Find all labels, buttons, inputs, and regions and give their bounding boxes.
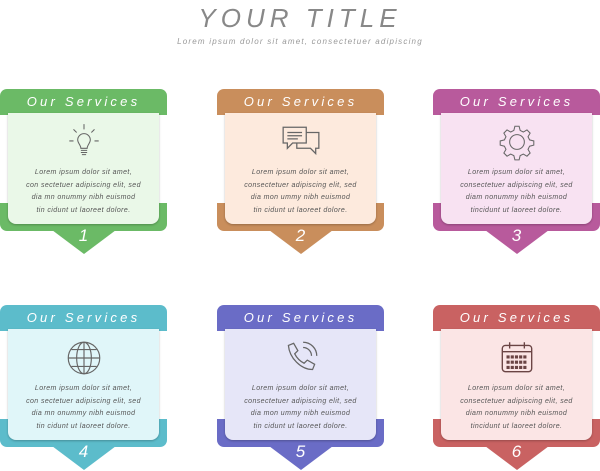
panel: service 1 <box>0 89 167 254</box>
header 2 <box>217 89 384 115</box>
text 2: Lorem ipsum dolor sit amet, <box>252 169 349 176</box>
text 5: consectetuer adipiscing elit, sed <box>244 398 357 404</box>
number 4: 4 <box>79 442 88 461</box>
text 1: Lorem ipsum dolor sit amet, <box>35 169 132 176</box>
subtitle: Lorem ipsum dolor sit amet, consectetuer adipiscing <box>177 37 423 46</box>
text 3: Lorem ipsum dolor sit amet, <box>468 169 565 176</box>
number 1: 1 <box>79 226 88 245</box>
text 6 <box>460 384 573 430</box>
icon: phone <box>288 342 318 370</box>
text 4: tin cidunt ut laoreet dolore. <box>36 422 131 430</box>
header 1 <box>0 89 167 115</box>
icon: gear <box>500 126 534 160</box>
text 4: dia mn onummy nibh euismod <box>32 410 135 417</box>
text 5: Lorem ipsum dolor sit amet, <box>252 385 349 392</box>
header 3 <box>433 89 600 115</box>
text 5: dia mon ummy nibh euismod <box>251 410 350 417</box>
text 3 <box>460 168 573 214</box>
text 1: dia mn onummy nibh euismod <box>32 194 135 201</box>
text 1 <box>26 168 141 214</box>
text 5 <box>244 384 357 430</box>
header 1: Our Services <box>27 94 140 109</box>
text 6: tincidunt ut laoreet dolore. <box>471 422 562 430</box>
icon: lightbulb <box>69 124 99 156</box>
text 5: tin cidunt ut laoreet dolore. <box>253 422 348 430</box>
text 6: diam nonummy nibh euismod <box>466 410 567 417</box>
text 1: tin cidunt ut laoreet dolore. <box>36 206 131 214</box>
panel: service 4 <box>0 305 167 470</box>
panel: service 2 <box>217 89 384 254</box>
text 2: consectetuer adipiscing elit, sed <box>244 182 357 188</box>
header 4: Our Services <box>27 310 140 325</box>
icon: globe <box>68 342 100 374</box>
header 3: Our Services <box>460 94 573 109</box>
text 2 <box>244 168 357 214</box>
header 5 <box>217 305 384 331</box>
text 6: consectetuer adipiscing elit, sed <box>460 398 573 404</box>
text 4: con sectetuer adipiscing elit, sed <box>26 398 141 404</box>
number 3: 3 <box>512 226 521 245</box>
number 6: 6 <box>512 442 521 461</box>
header 2: Our Services <box>244 94 357 109</box>
panel: service 6 <box>433 305 600 470</box>
number 5: 5 <box>296 442 305 461</box>
number 2: 2 <box>296 226 305 245</box>
header 4 <box>0 305 167 331</box>
header 5: Our Services <box>244 310 357 325</box>
header 6 <box>433 305 600 331</box>
text 6: Lorem ipsum dolor sit amet, <box>468 385 565 392</box>
text 4: Lorem ipsum dolor sit amet, <box>35 385 132 392</box>
text 3: diam nonummy nibh euismod <box>466 194 567 201</box>
text 3: tincidunt ut laoreet dolore. <box>471 206 562 214</box>
text 2: tin cidunt ut laoreet dolore. <box>253 206 348 214</box>
icon: chat <box>282 126 320 155</box>
panel: service 5 <box>217 305 384 470</box>
text 1: con sectetuer adipiscing elit, sed <box>26 182 141 188</box>
header 6: Our Services <box>460 310 573 325</box>
panel: service 3 <box>433 89 600 254</box>
title: YOUR TITLE <box>198 3 402 33</box>
icon: calendar <box>502 342 532 372</box>
text 4 <box>26 384 141 430</box>
text 3: consectetuer adipiscing elit, sed <box>460 182 573 188</box>
text 2: dia mon ummy nibh euismod <box>251 194 350 201</box>
